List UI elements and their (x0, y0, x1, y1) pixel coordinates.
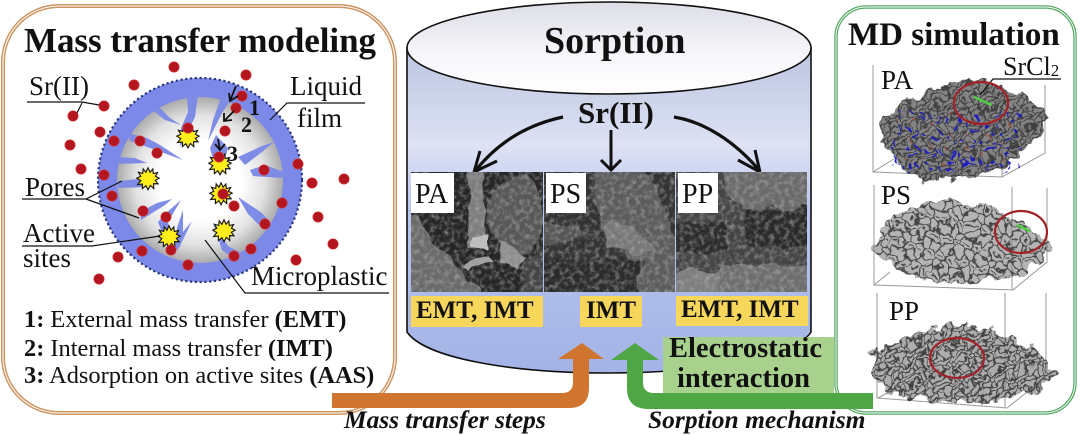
label: liquid film: film (297, 103, 342, 133)
label: Sr(II): Sr(II) (29, 71, 89, 101)
label: SrCl2: SrCl (1003, 52, 1051, 81)
label: microplastic (205, 240, 389, 293)
label: pores: Pores (25, 172, 85, 202)
legend: mass transfer steps: 3: Adsorption on active sites (AAS) (24, 362, 374, 389)
SEM image: PA (411, 172, 543, 292)
simulation box: PA (873, 52, 1061, 181)
heading: sorption: Sorption (544, 20, 685, 62)
heading: MD simulation: MD simulation (848, 17, 1060, 53)
SEM image: PS (544, 172, 675, 292)
tag: EMT, IMT (PP): EMT, IMT (681, 296, 799, 323)
callout: electrostatic interaction: Electrostatic (669, 333, 822, 364)
arrows to SEM images (474, 117, 760, 172)
simulation box: PA: PA (881, 65, 914, 95)
label: Sr(II): Sr(II) (578, 95, 654, 130)
legend: mass transfer steps (24, 306, 374, 389)
simulation box: PS (874, 180, 1052, 290)
label: SrCl2: 2 (1051, 61, 1059, 80)
panel: MD simulation (836, 7, 1075, 413)
callout: electrostatic interaction: interaction (677, 363, 810, 394)
simulation box: PP (872, 293, 1058, 408)
label: pores (22, 172, 139, 218)
legend: mass transfer steps: 1: External mass transfer (EMT) (24, 306, 346, 333)
diagram: microplastic sphere: 1 (249, 95, 260, 120)
label: liquid film (270, 71, 365, 133)
label: liquid film: Liquid (290, 71, 362, 101)
panel: sorption cylinder (395, 2, 825, 373)
label: active sites: sites (23, 243, 71, 273)
label: microplastic: Microplastic (251, 261, 387, 291)
simulation box: PP: PP (889, 296, 919, 326)
pores (118, 95, 284, 262)
label: mass transfer steps: Mass transfer steps (343, 406, 546, 434)
panel: mass transfer modeling (3, 6, 395, 413)
label: SrCl2 (980, 52, 1061, 95)
diagram: microplastic sphere: 2 (241, 112, 252, 137)
tag: EMT, IMT (PA): EMT, IMT (416, 297, 534, 324)
SEM image: PA: PA (415, 179, 449, 210)
callout: electrostatic interaction (663, 333, 834, 394)
sr(ii) ions (65, 62, 349, 284)
label: active sites (22, 218, 160, 273)
tag: IMT (PS): IMT (586, 297, 636, 324)
SEM image: PS: PS (550, 179, 581, 210)
arrow: mass transfer steps (332, 343, 604, 408)
diagram: microplastic sphere (65, 62, 349, 284)
diagram: microplastic sphere: 3 (227, 141, 238, 166)
label: sorption mechanism: Sorption mechanism (648, 405, 866, 434)
SEM image: PP: PP (682, 179, 713, 210)
arrow: sorption mechanism (611, 343, 873, 409)
SEM image: PP (676, 172, 807, 292)
legend: mass transfer steps: 2: Internal mass transfer (IMT) (24, 335, 333, 362)
microplastic adsorption sites (137, 126, 235, 248)
simulation box: PS: PS (881, 180, 911, 210)
step arrows 1 2 3 (215, 86, 238, 150)
label: active sites: Active (23, 218, 95, 248)
heading: mass transfer modeling: Mass transfer modeling (24, 21, 376, 60)
label: Sr(II) (27, 71, 99, 113)
